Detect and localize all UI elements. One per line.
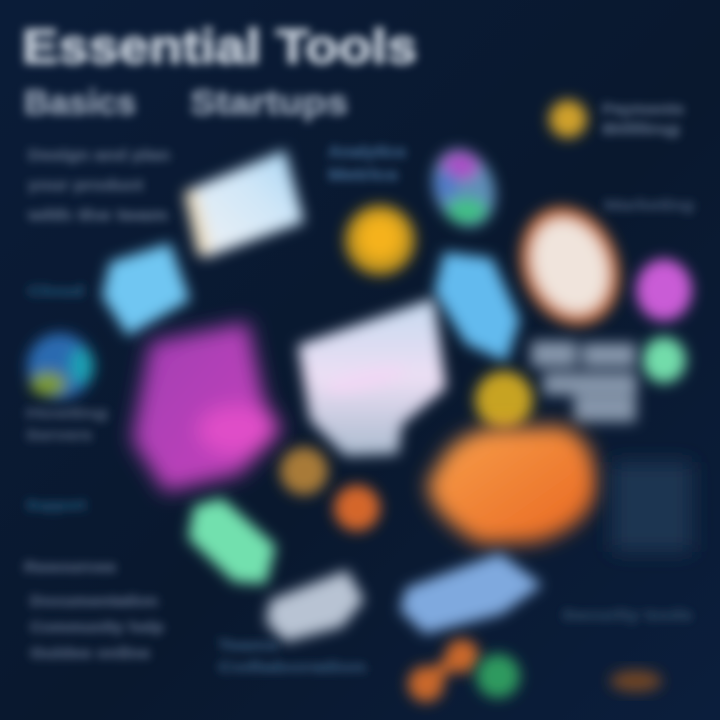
icon: white oval with orange ring	[503, 191, 637, 341]
text block: left lower list: Resources	[24, 559, 116, 576]
text block: left small: Cloud	[28, 283, 84, 300]
text block: bottom centre: Teams	[218, 637, 278, 654]
text block: bottom centre	[218, 637, 366, 676]
text block: left lower list: Documentation	[30, 593, 158, 610]
icon: top right coin with label: Billing	[602, 121, 680, 138]
subtitle: Startups	[190, 84, 348, 122]
icon: magenta blob	[636, 259, 692, 321]
icon: green node	[476, 654, 520, 698]
text block: top left: Design and plan	[28, 147, 170, 164]
icon: top right coin with label: Payments	[602, 101, 684, 118]
icon: light blue shape centre	[434, 252, 520, 362]
text block: left lower list: Guides online	[30, 645, 150, 662]
text block: grey cluster right	[531, 341, 637, 422]
icon: light blue diamond left	[102, 243, 190, 336]
text block: left middle: Servers	[26, 427, 92, 444]
text block: left middle	[26, 405, 108, 444]
text block: top centre: Analytics	[328, 144, 406, 161]
text block: top left: with the team	[27, 207, 168, 224]
icon: large orange box	[428, 426, 596, 544]
icon: yellow coin above orange box	[475, 371, 533, 429]
icon: yellow coin	[345, 205, 415, 275]
text block: left lower heading: Support	[26, 497, 86, 514]
icon: small orange circle	[334, 485, 380, 531]
text block: left lower list: Community help	[30, 619, 164, 636]
icon: document sheet	[184, 150, 304, 258]
icon: top right coin with label	[549, 100, 684, 138]
icon: blue pill	[400, 553, 542, 634]
text block: bottom right: Security tools	[562, 607, 692, 624]
icon: blue green globe	[27, 333, 94, 399]
icon: small amber circle	[280, 447, 328, 495]
text block: top centre	[328, 144, 406, 184]
icon: large purple box	[132, 322, 282, 492]
icon: small orange label	[610, 670, 662, 692]
text block: left middle: Hosting	[26, 405, 108, 422]
icon: mint green shape	[188, 498, 276, 584]
icon: orange connected nodes	[408, 639, 479, 702]
text block: top left	[27, 147, 170, 224]
icon: grey pill	[266, 570, 364, 642]
text block: right panel	[612, 462, 692, 552]
title: Essential Tools	[22, 21, 417, 74]
subtitle: Basics	[24, 84, 136, 122]
text block: right upper: Marketing	[604, 197, 694, 214]
subtitle	[24, 84, 348, 122]
text block: bottom centre: Collaboration	[218, 659, 366, 676]
icon: green blob	[642, 337, 686, 383]
icon: multicolour sphere	[422, 140, 506, 236]
icon: monitor screen	[298, 298, 446, 456]
text block: top centre: Metrics	[328, 167, 398, 184]
text block: top left: your product	[28, 177, 143, 194]
text block: left lower list	[24, 559, 164, 662]
